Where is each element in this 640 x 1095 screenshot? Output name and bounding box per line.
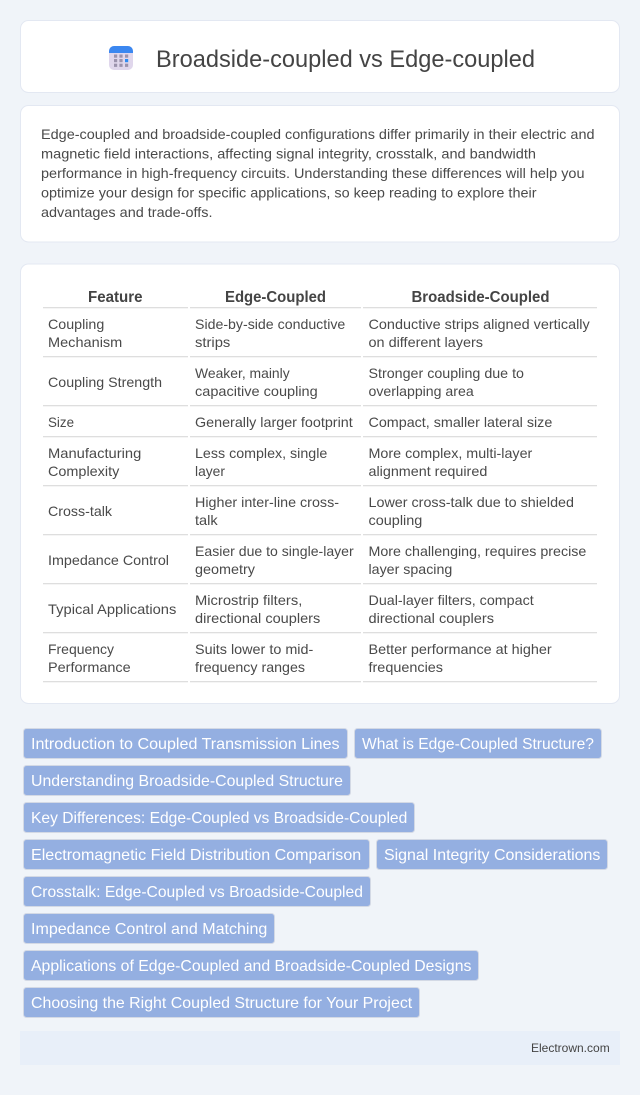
tag: key differences: Key Differences: Edge-Coupled vs Broadside-Coupled — [31, 810, 407, 827]
tag: field distribution — [24, 840, 370, 870]
row: manufacturing complexity: More complex, multi-layer — [368, 445, 533, 461]
row: coupling mechanism: Conductive strips aligned vertically — [368, 316, 590, 332]
row: frequency performance: Suits lower to mid- — [195, 641, 314, 657]
row: size: Generally larger footprint — [195, 414, 353, 430]
row: manufacturing complexity: Complexity — [48, 463, 119, 479]
row: cross-talk — [48, 494, 574, 528]
row: frequency performance — [48, 641, 552, 675]
row: coupling mechanism: on different layers — [368, 334, 483, 350]
row: size: Size — [48, 414, 74, 430]
table header row: Feature — [88, 289, 143, 306]
row: typical applications: Microstrip filters, — [195, 592, 302, 608]
footer bar — [20, 1031, 620, 1065]
tag: crosstalk: Crosstalk: Edge-Coupled vs Broadside-Coupled — [31, 884, 363, 901]
row: impedance control: More challenging, requires precise — [368, 543, 587, 559]
tag: broadside-coupled structure: Understanding Broadside-Coupled Structure — [31, 773, 343, 790]
row: frequency performance: Performance — [48, 659, 131, 675]
header panel — [20, 20, 620, 92]
row: coupling strength: capacitive coupling — [195, 383, 318, 399]
row: coupling strength: Stronger coupling due to — [368, 365, 524, 381]
intro paragraph: optimize your design for specific applications, so keep reading to explore their — [41, 184, 537, 200]
row: frequency performance: frequencies — [368, 659, 443, 675]
tag: crosstalk — [24, 876, 370, 906]
row: typical applications: Dual-layer filters, compact — [368, 592, 534, 608]
icon: calendar grid — [109, 46, 133, 70]
tag: choosing: Choosing the Right Coupled Structure for Your Project — [31, 995, 413, 1012]
intro paragraph: Edge-coupled and broadside-coupled configurations differ primarily in their electric and — [41, 126, 594, 142]
comparison table panel — [20, 264, 620, 704]
row: cross-talk: Lower cross-talk due to shielded — [368, 494, 574, 510]
tag: signal integrity — [376, 840, 608, 870]
row: frequency performance: Frequency — [48, 641, 114, 657]
tag: edge-coupled structure: What is Edge-Coupled Structure? — [362, 736, 594, 753]
row: coupling mechanism: Side-by-side conductive — [195, 316, 346, 332]
tag: key differences — [24, 802, 414, 832]
tag: introduction — [24, 728, 348, 758]
table header row: Edge-Coupled — [225, 289, 326, 306]
row: manufacturing complexity: Less complex, single — [195, 445, 328, 461]
intro paragraph: performance in high-frequency circuits. Understanding these differences will help you — [41, 165, 584, 181]
row: impedance control — [48, 543, 587, 577]
tag: introduction: Introduction to Coupled Transmission Lines — [31, 736, 340, 753]
tag: applications — [24, 950, 478, 980]
row: impedance control: geometry — [195, 561, 255, 577]
row: coupling strength: overlapping area — [368, 383, 474, 399]
row: coupling strength: Weaker, mainly — [195, 365, 290, 381]
row: coupling strength: Coupling Strength — [48, 374, 162, 390]
row: size — [48, 414, 553, 430]
row: manufacturing complexity: layer — [195, 463, 225, 479]
tag: applications: Applications of Edge-Coupled and Broadside-Coupled Designs — [31, 958, 471, 975]
row: coupling mechanism — [48, 316, 590, 350]
row: coupling mechanism: Mechanism — [48, 334, 122, 350]
topic tags — [24, 728, 608, 1018]
intro paragraph — [41, 126, 594, 220]
tag: impedance — [24, 914, 274, 944]
row: cross-talk: Higher inter-line cross- — [195, 494, 339, 510]
row: impedance control: Impedance Control — [48, 552, 169, 568]
tag: field distribution: Electromagnetic Field Distribution Comparison — [31, 847, 361, 864]
row: frequency performance: Better performance at higher — [368, 641, 552, 657]
row: coupling mechanism: Coupling — [48, 316, 104, 332]
row: typical applications — [48, 592, 534, 626]
tag: signal integrity: Signal Integrity Considerations — [384, 847, 600, 864]
tag: broadside-coupled structure — [24, 766, 350, 796]
row: manufacturing complexity — [48, 445, 533, 479]
row: typical applications: directional couplers — [195, 610, 320, 626]
row: size: Compact, smaller lateral size — [368, 414, 553, 430]
intro paragraph: advantages and trade-offs. — [41, 204, 212, 220]
row: impedance control: Easier due to single-layer — [195, 543, 354, 559]
table header row — [88, 289, 550, 306]
intro panel — [20, 106, 620, 242]
row: manufacturing complexity: alignment required — [368, 463, 487, 479]
row: cross-talk: Cross-talk — [48, 503, 113, 519]
row: frequency performance: frequency ranges — [195, 659, 305, 675]
footer credit: Electrown.com — [531, 1041, 610, 1055]
title: Broadside-coupled vs Edge-coupled — [156, 46, 535, 73]
row: typical applications: directional couplers — [368, 610, 494, 626]
row: typical applications: Typical Applications — [48, 601, 176, 617]
row: impedance control: layer spacing — [368, 561, 452, 577]
row: manufacturing complexity: Manufacturing — [48, 445, 141, 461]
row: coupling strength — [48, 365, 524, 399]
table header row: Broadside-Coupled — [412, 289, 550, 306]
tag: edge-coupled structure — [354, 728, 602, 758]
tag: impedance: Impedance Control and Matching — [31, 921, 267, 938]
tag: choosing — [24, 988, 420, 1018]
row: cross-talk: coupling — [368, 512, 422, 528]
row: coupling mechanism: strips — [195, 334, 230, 350]
row: cross-talk: talk — [195, 512, 219, 528]
intro paragraph: magnetic field interactions, affecting signal integrity, crosstalk, and bandwidth — [41, 146, 536, 162]
